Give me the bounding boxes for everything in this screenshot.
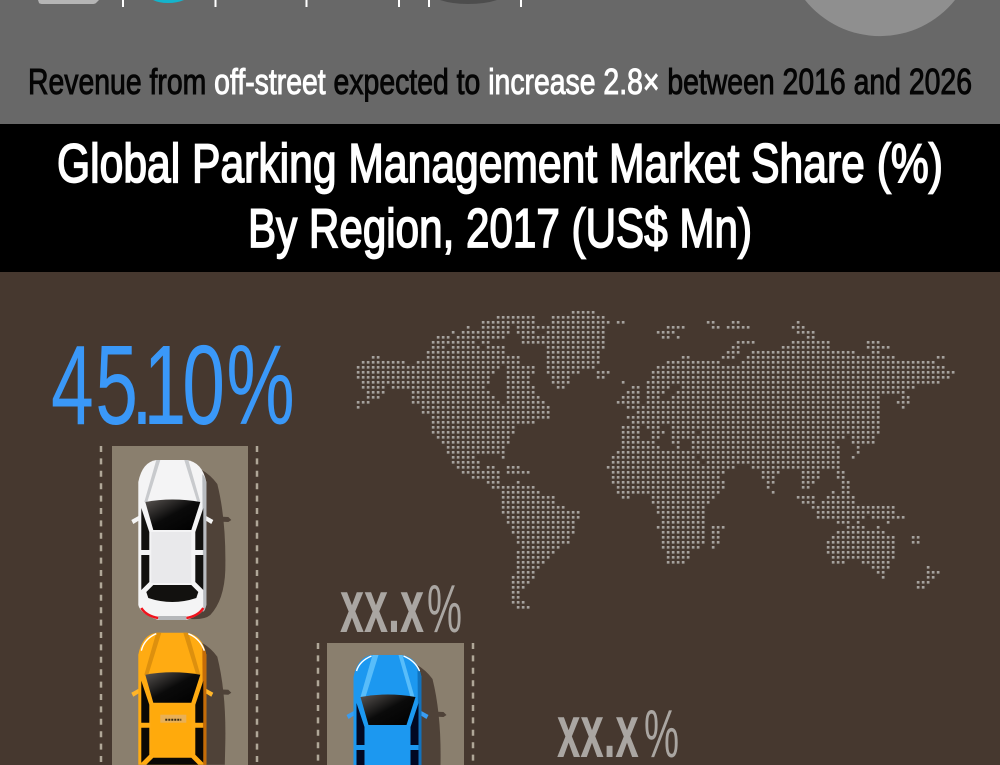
- title line 2: By Region, 2017 (US$ Mn): [248, 197, 752, 259]
- share value: xx.x% (third region): [557, 700, 679, 765]
- title banner: [0, 124, 1000, 272]
- taxi sign: [160, 715, 186, 723]
- share value: 45.10%: 45.10%: [51, 323, 295, 449]
- blue car: [346, 655, 446, 765]
- timeline ticks: [122, 0, 522, 7]
- cropped teal circle icon: [153, 0, 184, 3]
- lane markings: [318, 643, 473, 765]
- lane markings: [101, 446, 257, 765]
- parking bay 1: [101, 446, 257, 765]
- cropped laptop icon: [38, 0, 99, 4]
- cropped large circle: [805, 0, 955, 36]
- share value: xx.x% (second region): %: [427, 571, 462, 647]
- dotted world map: [357, 312, 955, 607]
- white car: [131, 460, 231, 620]
- cropped grey circle icon: [440, 0, 497, 4]
- parking bay 2: [318, 643, 473, 765]
- yellow taxi: [131, 633, 231, 765]
- share value: xx.x% (second region): xx.x: [340, 564, 424, 648]
- top grey panel: [0, 0, 1000, 124]
- brown market panel: [0, 272, 1000, 765]
